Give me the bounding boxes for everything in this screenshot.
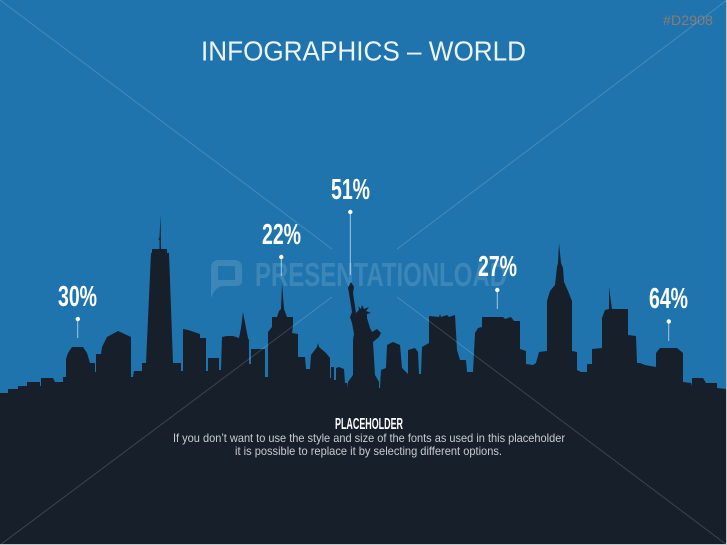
placeholder text block xyxy=(173,416,565,458)
marker: 51%: 51% xyxy=(331,174,370,206)
marker: 22% xyxy=(262,219,301,276)
document code: #D2908 xyxy=(663,12,713,28)
watermark: presentationload logo: PRESENTATIONLOAD xyxy=(255,256,507,293)
marker: 30% xyxy=(58,281,97,338)
placeholder text block: PLACEHOLDER xyxy=(335,416,403,433)
watermark: presentationload logo xyxy=(211,256,507,299)
title: INFOGRAPHICS – WORLD xyxy=(201,36,526,66)
marker: 27%: 27% xyxy=(478,251,517,283)
placeholder text block: it is possible to replace it by selecting different options. xyxy=(235,444,502,458)
city skyline silhouette xyxy=(0,215,727,545)
marker: 27% xyxy=(478,251,517,309)
placeholder text block: If you don’t want to use the style and size of the fonts as used in this placeholder xyxy=(173,431,565,445)
marker: 64% xyxy=(649,283,688,341)
marker: 51% xyxy=(331,174,370,275)
marker: 64%: 64% xyxy=(649,283,688,315)
marker: 22%: 22% xyxy=(262,219,301,251)
marker: 30%: 30% xyxy=(58,281,97,313)
